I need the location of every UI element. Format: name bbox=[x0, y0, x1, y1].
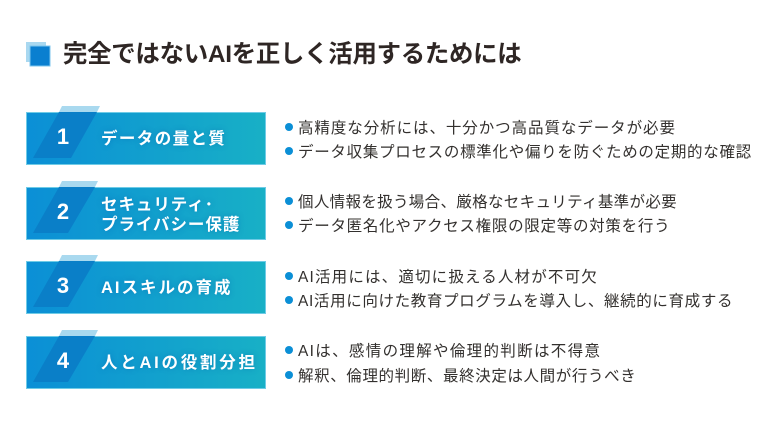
number 3: 3 bbox=[57, 273, 69, 298]
label 2: セキュリティ･ bbox=[101, 196, 214, 214]
bullet text 1-2: データ収集プロセスの標準化や偏りを防ぐための定期的な確認 bbox=[298, 144, 752, 161]
bullet text 1-1: 高精度な分析には、十分かつ高品質なデータが必要 bbox=[298, 120, 676, 137]
label 3: AIスキルの育成 bbox=[101, 278, 232, 296]
number 2: 2 bbox=[57, 199, 69, 224]
panel: item 1 label bbox=[26, 106, 266, 165]
panel: item 4 label bbox=[26, 330, 266, 389]
bullet text 2-1: 個人情報を扱う場合、厳格なセキュリティ基準が必要 bbox=[298, 194, 677, 211]
title icon: overlapping squares bbox=[26, 42, 50, 66]
bullet text 2-2: データ匿名化やアクセス権限の限定等の対策を行う bbox=[298, 218, 670, 235]
label 2: プライバシー保護 bbox=[101, 216, 240, 234]
label 4: 人とAIの役割分担 bbox=[101, 354, 258, 372]
panel: item 2 label bbox=[26, 181, 266, 240]
number 4: 4 bbox=[57, 348, 69, 373]
bullet text 4-1: AIは、感情の理解や倫理的判断は不得意 bbox=[298, 343, 601, 360]
number 1: 1 bbox=[57, 124, 69, 149]
icon: parallelogram 4 bbox=[33, 330, 98, 382]
label 1: データの量と質 bbox=[101, 130, 226, 148]
bullet text 3-2: AI活用に向けた教育プログラムを導入し、継続的に育成する bbox=[298, 293, 733, 310]
bullet text 3-1: AI活用には、適切に扱える人材が不可欠 bbox=[298, 269, 598, 286]
icon: parallelogram 3 bbox=[33, 255, 98, 307]
icon: parallelogram 1 bbox=[33, 106, 100, 158]
label 2 bbox=[101, 196, 240, 234]
bullet text 4-2: 解釈、倫理的判断、最終決定は人間が行うべき bbox=[298, 368, 636, 385]
icon: parallelogram 2 bbox=[33, 181, 98, 233]
title: 完全ではないAIを正しく活用するためには bbox=[63, 41, 521, 68]
panel: item 3 label bbox=[26, 255, 266, 314]
